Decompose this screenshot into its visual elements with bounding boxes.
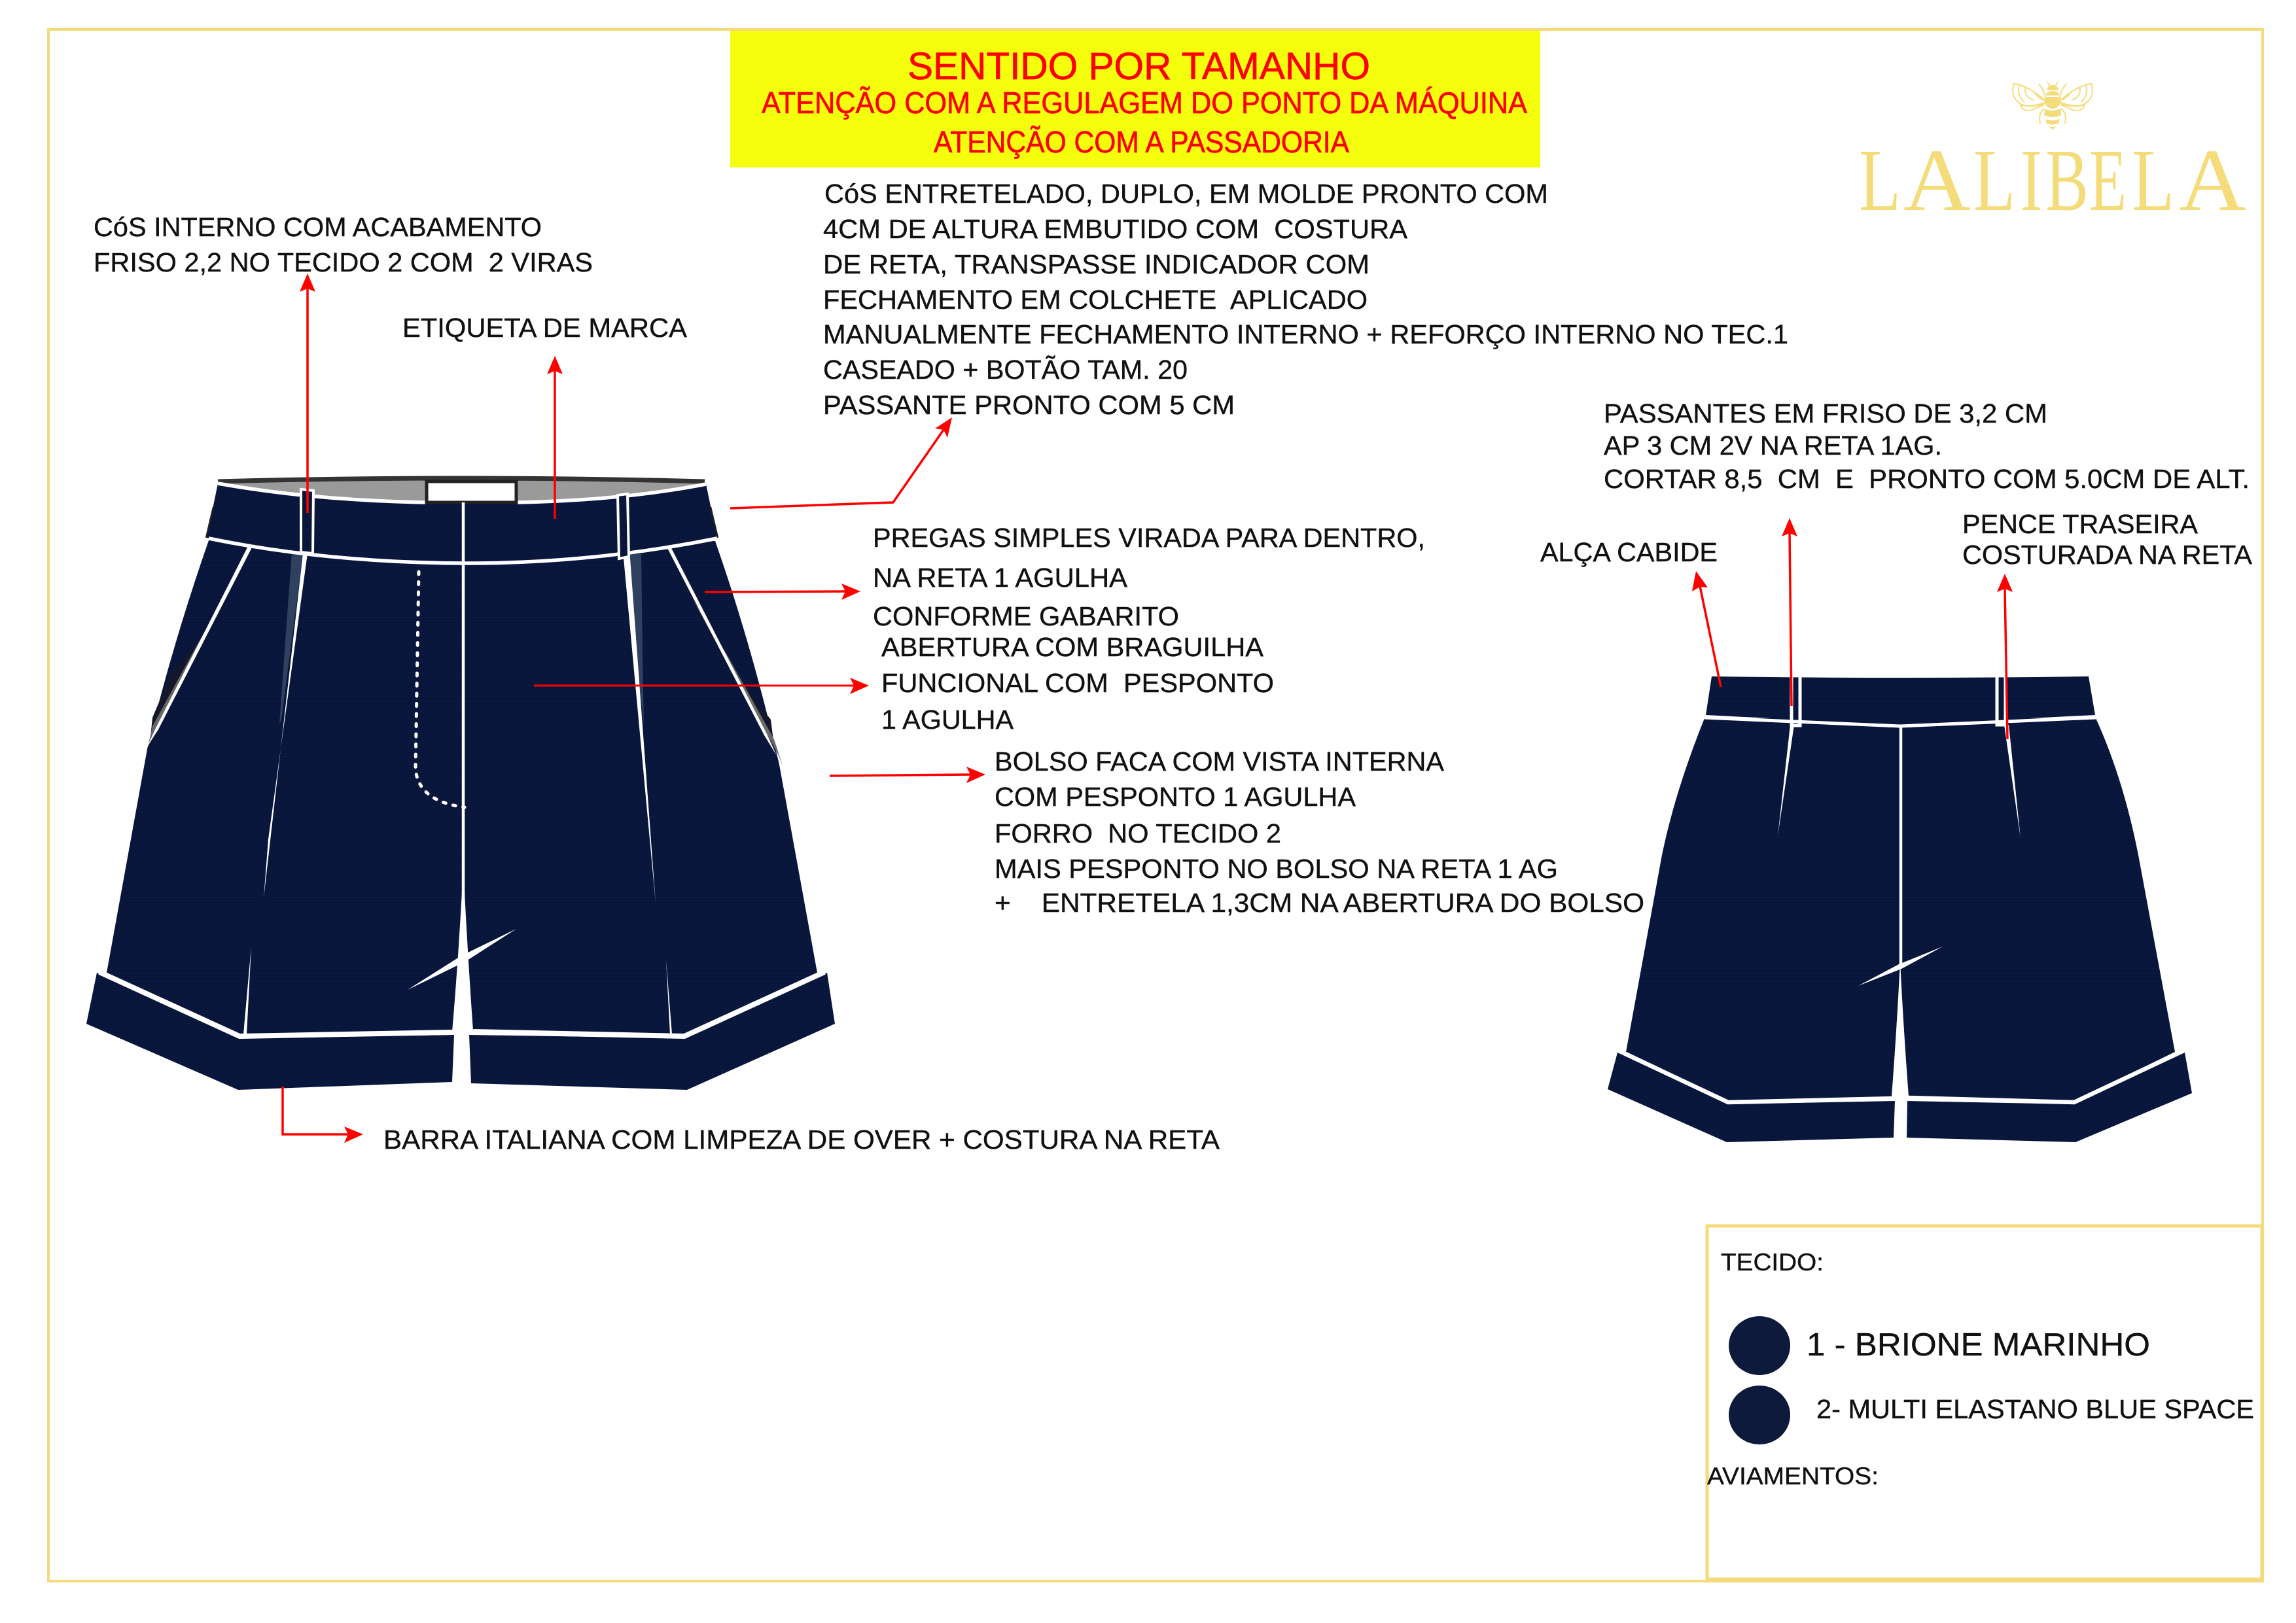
waistband corners	[206, 507, 718, 538]
text: pence traseira: PENCE TRASEIRA	[1962, 509, 2199, 539]
arrows	[283, 273, 2013, 1143]
back body	[1626, 718, 2175, 1101]
back waist seam	[1704, 718, 2096, 726]
arrow: pregas	[705, 584, 860, 600]
text: passantes: CORTAR 8,5 CM E PRONTO COM 5.0CM DE ALT.	[1604, 464, 2250, 494]
back waistband	[1706, 676, 2095, 725]
text: cos entretelado	[823, 179, 1788, 420]
logo wordmark: B	[2045, 131, 2089, 230]
back centre seam	[1899, 726, 1902, 966]
waistband interior	[218, 477, 706, 502]
belt loop right	[618, 494, 629, 559]
arrow: cos entretelado	[730, 417, 952, 508]
swatch 1	[1729, 1316, 1790, 1375]
text: barra italiana: BARRA ITALIANA COM LIMPEZA DE OVER + COSTURA NA RETA	[383, 1125, 1220, 1155]
arrow: etiqueta	[547, 356, 563, 519]
text: cos interno	[94, 212, 593, 277]
icon: bee	[2013, 80, 2093, 130]
panel: tecido e aviamentos	[1707, 1226, 2262, 1579]
text: cos entretelado: PASSANTE PRONTO COM 5 CM	[823, 390, 1235, 420]
logo wordmark: A	[1903, 131, 1971, 230]
logo wordmark: L	[2132, 131, 2174, 230]
banner line 2: ATENÇÃO COM A PASSADORIA	[934, 125, 1349, 159]
back belt loops	[1792, 676, 2005, 725]
pleat shading right	[628, 554, 644, 725]
text: bolso faca: COM PESPONTO 1 AGULHA	[995, 782, 1356, 812]
centre seam	[462, 502, 465, 962]
arrow: bolso	[830, 767, 985, 783]
logo wordmark: E	[2089, 131, 2127, 230]
belt loop left	[301, 489, 313, 553]
text: cos entretelado: MANUALMENTE FECHAMENTO INTERNO + REFORÇO INTERNO NO TEC.1	[823, 319, 1788, 349]
hem seam	[99, 972, 824, 1036]
arrow: passantes	[1782, 518, 1797, 706]
back hem seam	[1621, 1052, 2181, 1102]
pleats	[243, 553, 672, 1034]
text: pregas: CONFORME GABARITO	[873, 601, 1179, 631]
text: pence traseira	[1962, 509, 2253, 570]
text: braguilha: FUNCIONAL COM PESPONTO	[881, 668, 1274, 698]
text: pregas	[873, 523, 1425, 631]
text: passantes: AP 3 CM 2V NA RETA 1AG.	[1604, 430, 1942, 461]
fabric 2 label: 2- MULTI ELASTANO BLUE SPACE	[1816, 1394, 2254, 1424]
text: bolso faca	[995, 746, 1644, 918]
back darts	[1778, 725, 2021, 838]
text: braguilha	[881, 632, 1274, 735]
front view shorts	[86, 477, 835, 1090]
banner heading: SENTIDO POR TAMANHO	[908, 45, 1370, 88]
text: pence traseira: COSTURADA NA RETA	[1962, 540, 2253, 570]
pleat shading left	[279, 553, 303, 724]
pocket sliver left	[148, 584, 232, 747]
text: bolso faca: BOLSO FACA COM VISTA INTERNA	[995, 746, 1445, 777]
pocket opening lines	[147, 546, 777, 756]
back view shorts	[1608, 676, 2192, 1142]
tecido heading: TECIDO:	[1721, 1249, 1824, 1276]
text: etiqueta de marca: ETIQUETA DE MARCA	[402, 313, 688, 343]
back cuffs	[1608, 1053, 2192, 1142]
brand label	[427, 481, 516, 502]
logo wordmark: L	[1859, 131, 1901, 230]
back slash	[1858, 947, 1943, 986]
arrow: braguilha	[534, 678, 869, 694]
arrow: cos interno	[300, 273, 315, 513]
text: pregas: PREGAS SIMPLES VIRADA PARA DENTRO,	[873, 523, 1425, 553]
text: bolso faca: MAIS PESPONTO NO BOLSO NA RETA 1 AG	[995, 854, 1558, 884]
text: cos interno: CóS INTERNO COM ACABAMENTO	[94, 212, 542, 242]
hem cuffs	[86, 973, 835, 1090]
front body	[107, 540, 817, 1036]
text: braguilha: ABERTURA COM BRAGUILHA	[881, 632, 1264, 662]
swatch 2	[1729, 1386, 1790, 1444]
text: cos entretelado: FECHAMENTO EM COLCHETE APLICADO	[823, 285, 1368, 315]
text: cos entretelado: CóS ENTRETELADO, DUPLO, EM MOLDE PRONTO COM	[824, 179, 1548, 209]
text: pregas: NA RETA 1 AGULHA	[873, 563, 1128, 593]
fly topstitch	[415, 572, 465, 807]
arrow: alca cabide	[1692, 571, 1721, 687]
arrow: pence	[1997, 574, 2013, 739]
fabric 1 label: 1 - BRIONE MARINHO	[1807, 1327, 2150, 1363]
logo: Lalibela	[1859, 80, 2246, 230]
banner: yellow warning	[730, 31, 1540, 167]
text: passantes	[1604, 398, 2250, 494]
text: cos entretelado: 4CM DE ALTURA EMBUTIDO COM COSTURA	[823, 214, 1408, 244]
logo wordmark: A	[2179, 131, 2246, 230]
arrow: barra	[283, 1087, 363, 1143]
waistband	[207, 483, 717, 563]
logo wordmark: L	[1973, 131, 2015, 230]
crotch slash	[408, 929, 516, 990]
aviamentos heading: AVIAMENTOS:	[1707, 1463, 1879, 1490]
pocket sliver right	[692, 599, 783, 767]
logo wordmark: I	[2021, 131, 2042, 230]
text: cos entretelado: DE RETA, TRANSPASSE INDICADOR COM	[823, 249, 1369, 279]
text: alca cabide: ALÇA CABIDE	[1540, 537, 1718, 567]
text: bolso faca: + ENTRETELA 1,3CM NA ABERTURA DO BOLSO	[995, 888, 1644, 918]
text: bolso faca: FORRO NO TECIDO 2	[995, 818, 1281, 848]
text: cos entretelado: CASEADO + BOTÃO TAM. 20	[823, 355, 1188, 385]
text: passantes: PASSANTES EM FRISO DE 3,2 CM	[1604, 398, 2047, 428]
banner line 1: ATENÇÃO COM A REGULAGEM DO PONTO DA MÁQUINA	[762, 86, 1527, 120]
text: cos interno: FRISO 2,2 NO TECIDO 2 COM 2 VIRAS	[94, 247, 593, 277]
waistband seams	[209, 483, 717, 563]
text: braguilha: 1 AGULHA	[881, 705, 1014, 735]
